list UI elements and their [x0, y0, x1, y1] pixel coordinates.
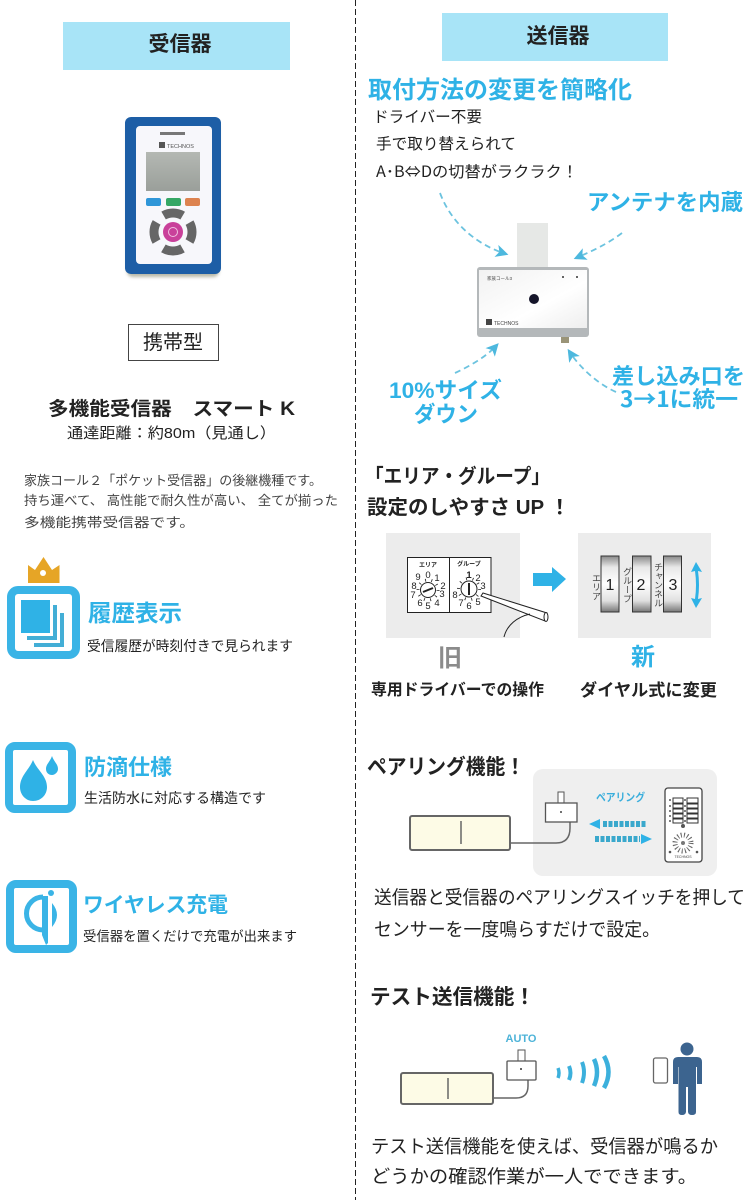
feature: history title: 履歴表示 [88, 600, 182, 626]
diagram: new dial switches: グループ [622, 567, 632, 603]
diagram: old rotary switches: エリア [419, 562, 437, 569]
diagram: new dial switches: 2 [637, 577, 646, 594]
diagram: old rotary switches: 4 [434, 598, 440, 609]
diagram: old rotary switches: 3 [439, 589, 445, 600]
diagram: old rotary switches: 5 [475, 597, 481, 608]
diagram: test transmission [401, 1033, 702, 1115]
diagram: old rotary switches: 8 [411, 581, 417, 592]
diagram: old rotary switches: 3 [480, 581, 486, 592]
heading: transmitter: 送信器 [526, 25, 590, 48]
product name: 多機能受信器 スマート K [48, 397, 295, 420]
diagram: old rotary switches: 8 [452, 590, 458, 601]
caption: new method: ダイヤル式に変更 [580, 680, 717, 700]
panel: transmitter [365, 13, 745, 1187]
callout: unified ports: 差し込み口を [612, 364, 745, 389]
diagram: old rotary switches: 9 [415, 572, 421, 583]
callout: built-in antenna: アンテナを内蔵 [587, 190, 743, 215]
description: 家族コール２「ポケット受信器」の後継機種です。 [24, 473, 322, 488]
diagram: new dial switches: 3 [669, 577, 678, 594]
image: handheld receiver [125, 117, 221, 277]
feature: wireless text: 受信器を置くだけで充電が出来ます [83, 929, 297, 944]
caption: old method: 専用ドライバーでの操作 [371, 680, 544, 699]
label: handheld type [128, 324, 218, 360]
icon: history [11, 590, 76, 655]
pairing text [374, 887, 745, 940]
feature: drip-proof title: 防滴仕様 [84, 755, 172, 780]
diagram: old rotary switches: 6 [417, 598, 423, 609]
heading: transmitter [442, 13, 668, 61]
section title: test transmission: テスト送信機能！ [370, 986, 535, 1009]
diagram: new dial switches: チャンネル [653, 562, 663, 608]
diagram: old rotary switches: 1 [434, 573, 440, 584]
diagram: pairing: ペアリング [596, 790, 645, 804]
arrows: dashed pointers [440, 193, 622, 392]
diagram: old rotary switches: 2 [440, 581, 446, 592]
arrow: old to new [533, 567, 566, 592]
label: new: 新 [631, 644, 655, 671]
image: handheld receiver: TECHNOS [167, 144, 194, 150]
diagram: test transmission: AUTO [506, 1033, 537, 1045]
center divider [354, 0, 356, 1200]
heading: receiver [63, 22, 290, 70]
label: handheld type: 携帯型 [143, 331, 203, 354]
feature: history text: 受信履歴が時刻付きで見られます [87, 638, 293, 654]
description: 持ち運べて、 高性能で耐久性が高い、 全てが揃った [24, 493, 338, 508]
callout: 10 percent smaller [389, 378, 502, 427]
callout: unified ports: 3→1に統一 [620, 382, 738, 414]
test text: どうかの確認作業が一人でできます。 [371, 1166, 697, 1187]
feature: drip-proof text: 生活防水に対応する構造です [84, 790, 266, 806]
pairing text: センサーを一度鳴らすだけで設定。 [374, 919, 660, 940]
section text: mounting: A･B⇔Dの切替がラクラク！ [376, 160, 578, 182]
section title: simplified mounting: 取付方法の変更を簡略化 [368, 77, 632, 104]
image: transmitter device: TECHNOS [494, 321, 519, 327]
icon: wireless charging [10, 884, 73, 949]
section text: mounting: 手で取り替えられて [376, 135, 516, 153]
section title: area group: 「エリア・グループ」 [365, 464, 550, 488]
section text: mounting: ドライバー不要 [373, 108, 482, 126]
transmission range: 通達距離：約80m（見通し） [67, 425, 276, 442]
panel: receiver [9, 22, 338, 949]
section title: area group: 設定のしやすさ UP ！ [367, 496, 570, 519]
diagram: new dial switches: エリア [591, 574, 601, 600]
description [24, 473, 338, 530]
diagram: old rotary switches: 5 [425, 601, 431, 612]
diagram: old rotary switches: 0 [425, 570, 431, 581]
section title: pairing: ペアリング機能！ [367, 755, 525, 779]
diagram: old rotary switches: 7 [458, 598, 464, 609]
test text: テスト送信機能を使えば、受信器が鳴るか [371, 1136, 718, 1157]
diagram: new dial switches [578, 533, 711, 638]
label: old: 旧 [438, 645, 462, 672]
diagram: old rotary switches: 1 [466, 570, 472, 581]
diagram: old rotary switches: 6 [466, 601, 472, 612]
callout: 10 percent smaller: ダウン [414, 402, 478, 427]
diagram: old rotary switches: 7 [410, 590, 416, 601]
image: transmitter device: 家族コール3 [487, 275, 512, 282]
test text [371, 1136, 718, 1187]
image: transmitter device [477, 223, 589, 343]
callout: 10 percent smaller: 10%サイズ [389, 378, 502, 403]
callout: unified ports [612, 364, 745, 414]
diagram: old rotary switches: 2 [475, 573, 481, 584]
description: 多機能携帯受信器です。 [24, 515, 195, 530]
feature: wireless title: ワイヤレス充電 [83, 894, 228, 917]
icon: water drops [9, 746, 72, 809]
section text: mounting [373, 108, 578, 182]
section title: area group [365, 464, 570, 519]
icon: crown [28, 557, 60, 583]
diagram: new dial switches: 1 [606, 577, 615, 594]
diagram: old rotary switches: グループ [457, 560, 481, 568]
heading: receiver: 受信器 [148, 33, 212, 56]
diagram: pairing [410, 769, 717, 876]
diagram: pairing: TECHNOS [674, 855, 692, 859]
diagram: old rotary switches [386, 533, 548, 638]
